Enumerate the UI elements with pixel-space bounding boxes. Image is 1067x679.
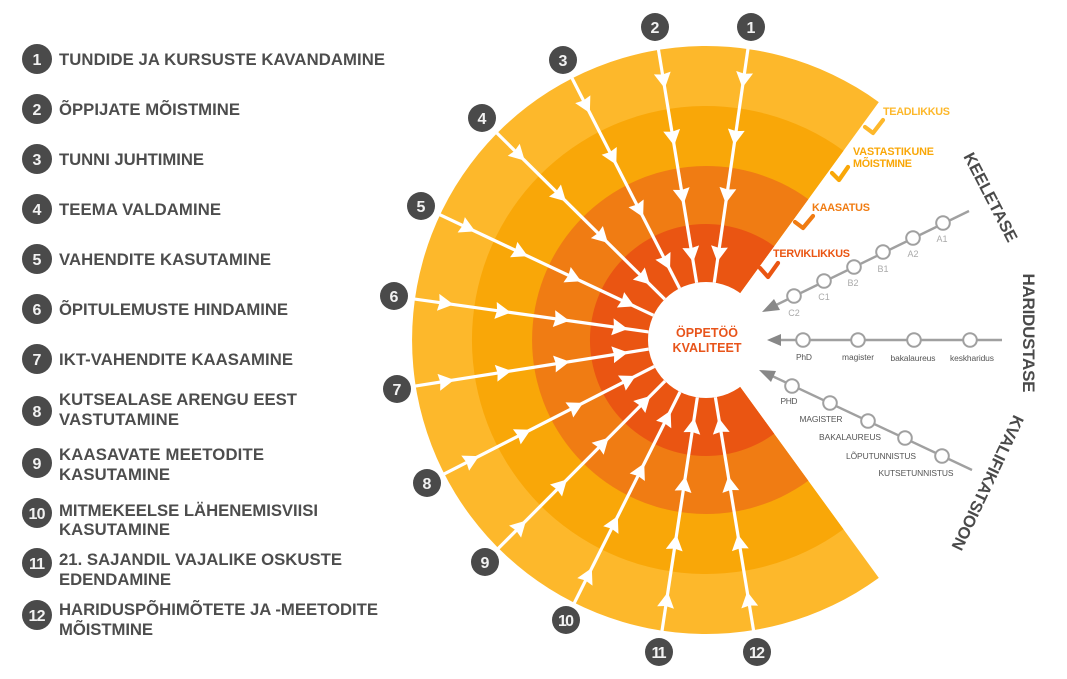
heading: haridustase: HARIDUSTASE [1019,274,1038,392]
centre label: ÖPPETÖÖ [676,325,738,340]
badge 10: 10 [558,613,574,630]
badge 7 [383,375,411,403]
scale: haridustase [767,333,1002,363]
legend item 12 [22,599,378,639]
arrow ray 6 [412,290,650,340]
centre label [672,325,742,355]
arrow ray 11 [653,396,706,634]
ray badges [380,13,771,666]
legend item 9: KAASAVATE MEETODITE [59,445,264,464]
legend item 9: 9 [33,456,42,473]
legend item 2 [22,94,240,124]
legend item 10: KASUTAMINE [59,520,170,539]
arrow ray 7 [412,341,650,395]
scale: kvalifikatsioon: KUTSETUNNISTUS [878,468,954,478]
badge 12 [743,638,771,666]
badge 1 [737,13,765,41]
legend item 7: IKT-VAHENDITE KAASAMINE [59,350,293,369]
arrow ray 10 [566,388,688,608]
legend item 1 [22,44,385,74]
badge 11: 11 [652,645,667,662]
legend item 4: TEEMA VALDAMINE [59,200,221,219]
arrowhead: keeletase [762,299,780,312]
legend item 6: ÕPITULEMUSTE HINDAMINE [59,299,288,319]
scale: keeletase: C1 [818,292,830,302]
heading: keeletase: KEELETASE [960,150,1021,245]
ring label: teadlikkus [865,106,950,133]
arrow ray 2 [650,47,705,284]
scale: keeletase: A1 [936,234,948,244]
badge 3 [549,46,577,74]
legend item 8: KUTSEALASE ARENGU EEST [59,390,298,409]
scale: haridustase: magister [842,352,874,362]
ring: terviklikkus [590,224,774,456]
ring: kaasatus [532,166,808,514]
scale: kvalifikatsioon: MAGISTER [800,414,842,424]
arrow ray 9 [491,375,671,556]
badge 1: 1 [747,20,756,37]
ring label: vastastikune mõistmine: VASTASTIKUNE [853,146,934,158]
badge 9: 9 [481,555,490,572]
centre label: KVALITEET [672,341,742,355]
legend item 12: HARIDUSPÕHIMÕTETE JA -MEETODITE [59,599,378,619]
legend item 9 [22,445,264,484]
scale: kvalifikatsioon: PHD [780,396,798,406]
badge 5: 5 [417,199,426,216]
legend item 11: 11 [29,556,45,573]
ring: vastastikune mõistmine [472,106,844,574]
arrowhead: kvalifikatsioon [759,370,776,382]
ring label: kaasatus [795,202,870,228]
scale: kvalifikatsioon: LÕPUTUNNISTUS [846,451,916,461]
legend item 6: 6 [33,302,42,319]
radial wedge chart [412,46,879,634]
badge 11 [645,638,673,666]
legend item 10 [22,498,318,539]
badge 6 [380,282,408,310]
badge 5 [407,192,435,220]
arrow ray 12 [707,396,762,633]
legend item 10: 10 [28,506,46,523]
badge 8: 8 [423,476,432,493]
badge 12: 12 [749,645,765,662]
ring label: terviklikkus [760,248,850,277]
badge 2: 2 [651,20,660,37]
scale: haridustase: PhD [796,352,812,362]
badge 10 [552,606,580,634]
arrowhead: haridustase [767,334,781,346]
badge 2 [641,13,669,41]
ring label: kaasatus: KAASATUS [812,202,870,214]
badge 8 [413,469,441,497]
ring label: terviklikkus: TERVIKLIKKUS [773,248,850,260]
badge 7: 7 [393,382,402,399]
ring label: vastastikune mõistmine: MÕISTMINE [853,157,912,170]
scale: keeletase [762,211,969,318]
legend item 4: 4 [33,202,42,219]
legend item 12: 12 [28,608,46,625]
legend item 5: VAHENDITE KASUTAMINE [59,250,271,269]
legend item 6 [22,294,288,324]
legend item 8: 8 [33,404,42,421]
legend item 10: MITMEKEELSE LÄHENEMISVIISI [59,501,318,520]
scale: keeletase: B2 [847,278,859,288]
ring: teadlikkus [412,46,879,634]
arrow ray 8 [439,359,658,482]
legend item 9: KASUTAMINE [59,465,170,484]
legend item 5 [22,244,271,274]
arrow ray 3 [564,73,687,292]
scale: haridustase: bakalaureus [890,353,936,363]
badge 3: 3 [559,53,568,70]
legend item 4 [22,194,221,224]
ring label: vastastikune mõistmine [832,146,934,180]
arrow ray 5 [435,206,657,323]
scale: kvalifikatsioon: BAKALAUREUS [819,432,881,442]
legend item 8: VASTUTAMINE [59,410,179,429]
legend item 2: ÕPPIJATE MÕISTMINE [59,99,240,119]
legend item 3: 3 [33,152,42,169]
badge 4 [468,104,496,132]
legend item 2: 2 [33,102,42,119]
arrow ray 1 [706,46,757,284]
legend item 8 [22,390,298,429]
legend item 5: 5 [33,252,42,269]
legend item 7: 7 [33,352,42,369]
badge 6: 6 [390,289,399,306]
scale: keeletase: B1 [877,264,889,274]
arrow ray 4 [490,126,671,305]
centre circle [648,282,764,398]
legend item 3 [22,144,204,174]
legend item 7 [22,344,293,374]
legend item 11 [22,548,342,589]
badge 9 [471,548,499,576]
heading: kvalifikatsioon: KVALIFIKATSIOON [948,412,1027,553]
numbered legend list [22,44,385,639]
legend item 1: 1 [33,52,42,69]
badge 4: 4 [478,111,487,128]
scale: keeletase: A2 [907,249,919,259]
legend item 1: TUNDIDE JA KURSUSTE KAVANDAMINE [59,50,385,69]
scale: kvalifikatsioon [759,370,972,478]
ring label: teadlikkus: TEADLIKKUS [883,106,950,118]
scale: keeletase: C2 [788,308,800,318]
legend item 11: 21. SAJANDIL VAJALIKE OSKUSTE [59,550,342,569]
legend item 3: TUNNI JUHTIMINE [59,150,204,169]
legend item 12: MÕISTMINE [59,619,153,639]
scale: haridustase: keskharidus [950,353,994,363]
legend item 11: EDENDAMINE [59,570,171,589]
